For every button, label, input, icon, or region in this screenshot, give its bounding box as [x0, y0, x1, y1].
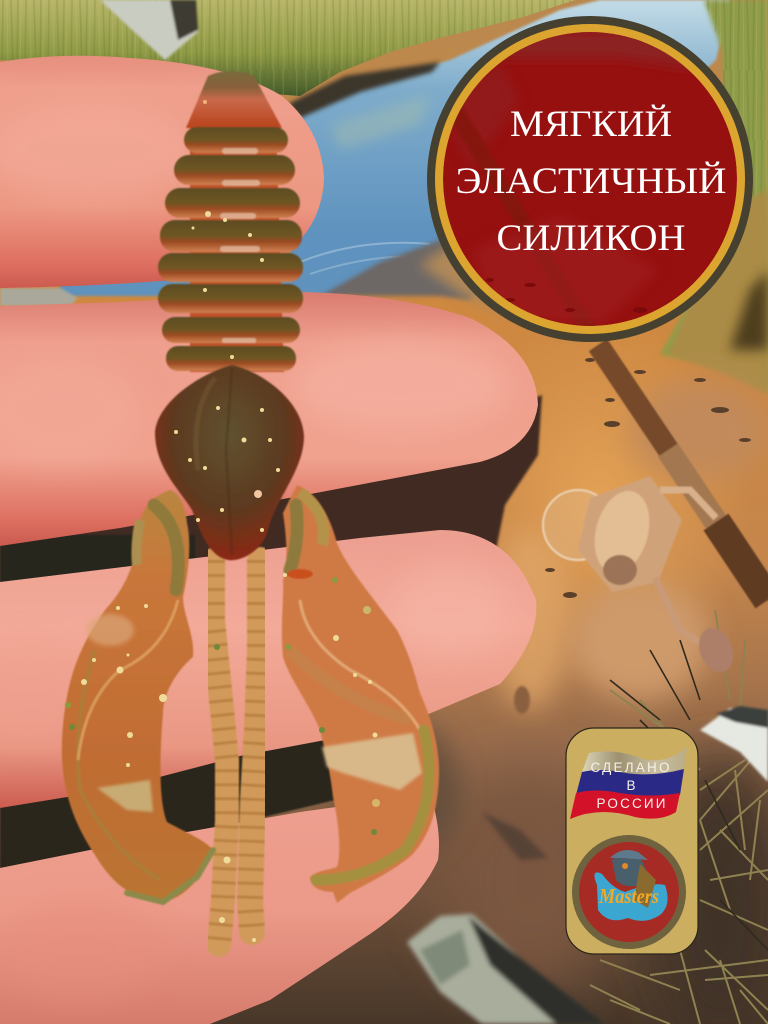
dark strip left — [0, 535, 195, 600]
right claw — [282, 485, 439, 903]
flag caption: РОССИИ — [596, 796, 666, 811]
finger 2 — [0, 292, 538, 546]
hand fingers — [0, 56, 538, 1024]
sand shading — [630, 380, 768, 480]
fish: right — [700, 706, 768, 782]
left claw — [62, 490, 213, 902]
shadow on sand — [482, 812, 548, 860]
spinning reel — [543, 476, 739, 677]
masters logo — [572, 835, 686, 949]
wet sand behind lower fingers — [340, 720, 460, 860]
flag caption: СДЕЛАНО — [590, 760, 670, 775]
soft lure — [62, 71, 439, 945]
badge border — [427, 16, 753, 342]
glitter — [65, 100, 380, 942]
badge title text: МЯГКИЙ — [510, 103, 672, 145]
flag caption — [590, 760, 670, 811]
wet shore — [320, 240, 520, 300]
badge gold ring — [435, 24, 745, 334]
dark river bank — [288, 62, 440, 118]
finger 4 — [0, 794, 439, 1024]
masters logo: Masters — [598, 884, 659, 908]
badge title text: СИЛИКОН — [496, 218, 686, 259]
abdomen ribs — [158, 71, 303, 372]
badge title text — [456, 103, 726, 259]
reeds bottom right — [590, 610, 768, 1024]
grass bank right — [660, 0, 768, 390]
fish: bottom — [407, 914, 606, 1024]
grass bank top left — [0, 0, 575, 96]
head — [155, 365, 304, 560]
round title badge — [427, 16, 753, 345]
fishing rod — [598, 345, 768, 600]
dark strip lower left — [0, 735, 335, 880]
sand specks — [514, 358, 751, 714]
finger 1 — [0, 56, 324, 288]
finger 3 — [0, 530, 536, 808]
antennae — [213, 560, 260, 945]
russian flag — [570, 747, 687, 819]
river water — [60, 0, 730, 296]
origin and brand card — [566, 728, 698, 954]
badge title text: ЭЛАСТИЧНЫЙ — [456, 160, 726, 202]
fish: top — [100, 0, 198, 60]
flag caption: В — [626, 778, 636, 793]
dark pool between fingers — [0, 395, 542, 610]
badge red fill — [443, 32, 737, 326]
grey object between fingers — [0, 288, 78, 306]
